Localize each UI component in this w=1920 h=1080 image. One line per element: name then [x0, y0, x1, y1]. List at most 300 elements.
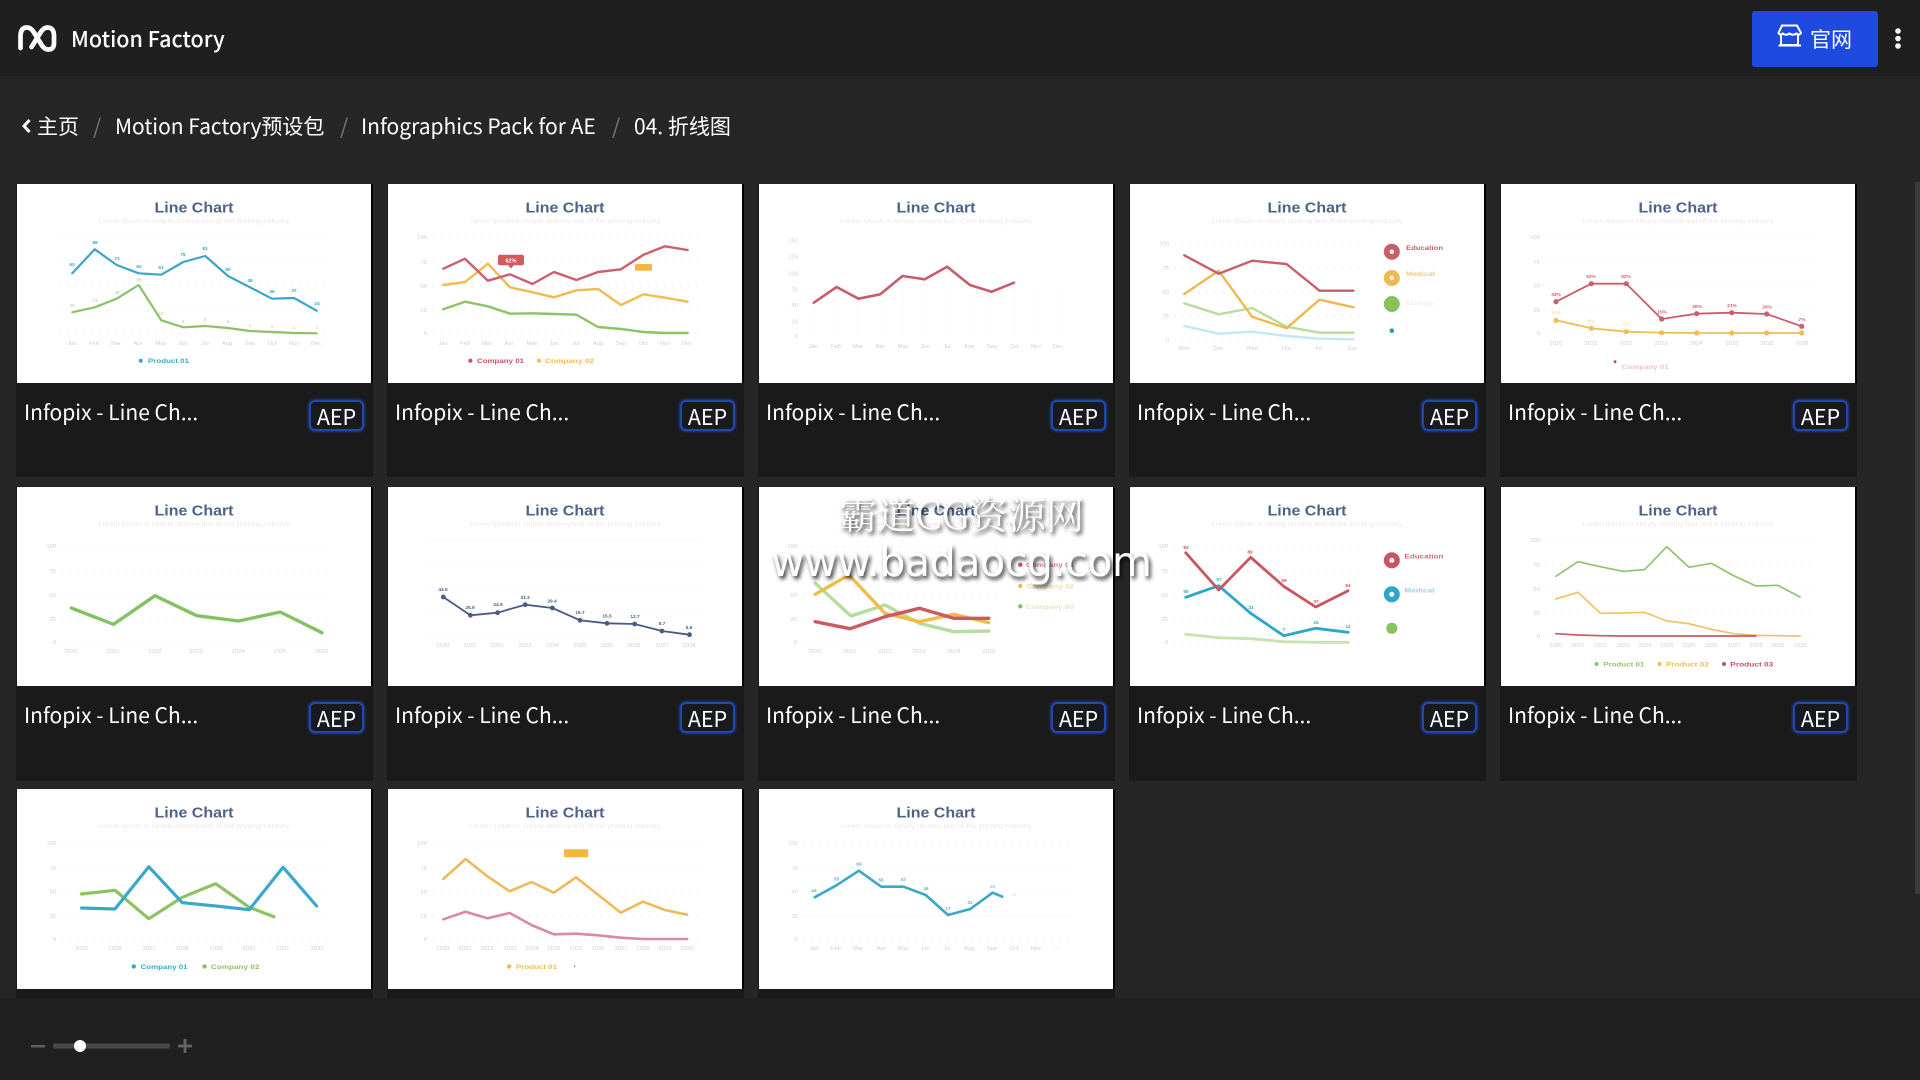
- chart thumbnail 13: 47: [901, 877, 906, 883]
- icon: store: [1777, 24, 1802, 46]
- card 4: [1129, 184, 1486, 477]
- card 3: [758, 184, 1115, 477]
- chart thumbnail 12: 2022: [481, 946, 493, 952]
- chart thumbnail 12: 2025: [548, 946, 560, 952]
- chart thumbnail 4: Sat: [1348, 346, 1357, 352]
- chart thumbnail 7: 25.9: [465, 605, 475, 611]
- chart thumbnail 2: Apr: [504, 341, 514, 347]
- card title: Infopix - Line Ch...: [766, 397, 940, 427]
- chart thumbnail 12: 2025: [570, 946, 582, 952]
- chart thumbnail 1: 81: [202, 246, 208, 252]
- chart thumbnail 2: May: [527, 341, 538, 347]
- chart thumbnail 1: 26: [69, 303, 75, 309]
- chart thumbnail 3: 125: [788, 255, 798, 261]
- chart thumbnail 4: Wed: [1246, 346, 1258, 352]
- chart thumbnail 10: 0: [1537, 634, 1540, 640]
- chart thumbnail 8: Company 02: [1026, 584, 1074, 590]
- chart thumbnail 8: [759, 487, 1113, 686]
- chart thumbnail 13: 0: [795, 937, 798, 943]
- chart thumbnail 6: 2023: [190, 649, 202, 655]
- chart thumbnail 2: Jan: [438, 341, 448, 347]
- card title: Infopix - Line Ch...: [1508, 397, 1682, 427]
- chart thumbnail 11: 2032: [311, 946, 323, 952]
- chart thumbnail 4: Tue: [1213, 346, 1223, 352]
- top navigation bar: [0, 0, 1920, 76]
- chart thumbnail 6: Line Chart: [154, 504, 234, 520]
- chart thumbnail 5: [1501, 184, 1855, 383]
- chart thumbnail 4: Fri: [1316, 346, 1322, 352]
- chart thumbnail 12: 2029: [659, 946, 671, 952]
- chart thumbnail 12: [388, 789, 742, 989]
- chart thumbnail 3: May: [898, 344, 909, 350]
- chart thumbnail 13: 35: [990, 884, 995, 890]
- chart thumbnail 12: 100: [417, 841, 427, 847]
- chart thumbnail 13: 55: [878, 878, 884, 884]
- chart thumbnail 2: Nov: [660, 341, 670, 347]
- chart thumbnail 1: 2: [249, 323, 252, 329]
- chart thumbnail 11: Company 02: [211, 964, 260, 971]
- card 13: [758, 789, 1115, 998]
- chart thumbnail 11: Lorem Ipsum is simply dummy text of the printing industry: [98, 824, 290, 830]
- chart thumbnail 7: 2024: [546, 643, 559, 649]
- chart thumbnail 8: 2020: [809, 649, 821, 655]
- chart thumbnail 9: 31: [1248, 605, 1254, 611]
- chart thumbnail 9: Education: [1404, 554, 1443, 561]
- icon: back chevron: [22, 119, 30, 133]
- chart thumbnail 1: 61: [158, 265, 164, 271]
- chart thumbnail 5: 21%: [1727, 303, 1738, 309]
- chart thumbnail 13: Feb: [831, 946, 841, 952]
- chart thumbnail 10: 2030: [1794, 643, 1806, 649]
- chart thumbnail 7: 33.3: [520, 595, 530, 601]
- chart thumbnail 7: 2023: [519, 643, 531, 649]
- chart thumbnail 2: Dec: [682, 341, 692, 347]
- separator: /: [340, 111, 348, 141]
- chart thumbnail 5: 75: [1534, 260, 1540, 266]
- badge: AEP: AEP: [1059, 703, 1098, 734]
- chart thumbnail 9: 75: [1162, 569, 1168, 575]
- chart thumbnail 9: 15: [1313, 620, 1319, 626]
- chart thumbnail 7: Lorem Ipsum is simply dummy text of the printing industry: [470, 522, 660, 528]
- chart thumbnail 11: [17, 789, 371, 989]
- card title: Infopix - Line Ch...: [1137, 397, 1311, 427]
- chart thumbnail 8: 2021: [844, 649, 856, 655]
- chart thumbnail 6: [17, 487, 371, 686]
- chart thumbnail 5: Company 01: [1622, 364, 1669, 371]
- chart thumbnail 5: 0: [1537, 331, 1540, 337]
- chart thumbnail 5: 2020: [1550, 341, 1562, 347]
- chart thumbnail 1: Jan: [67, 341, 77, 347]
- chart thumbnail 12: 2023: [504, 946, 516, 952]
- chart thumbnail 6: 2022: [149, 649, 161, 655]
- crumb: presets: Motion Factory预设包: [115, 111, 324, 141]
- chart thumbnail 12: Lorem Ipsum is simply dummy text of the printing industry: [470, 824, 660, 830]
- chart thumbnail 13: Line Chart: [896, 806, 976, 822]
- card 12: [387, 789, 744, 998]
- chart thumbnail 13: Lorem Ipsum is simply dummy text of the printing industry: [840, 824, 1032, 830]
- badge: AEP: AEP: [688, 401, 727, 432]
- chart thumbnail 1: 75: [180, 252, 186, 258]
- chart thumbnail 5: 33%: [1551, 292, 1562, 298]
- chart thumbnail 10: 2020: [1550, 643, 1562, 649]
- chart thumbnail 7: 15.5: [602, 614, 612, 620]
- chart thumbnail 1: 1: [271, 324, 274, 330]
- chart thumbnail 1: Sep: [245, 341, 255, 347]
- chart thumbnail 9: 0: [1165, 640, 1168, 646]
- badge: AEP: [309, 702, 364, 733]
- chart thumbnail 2: Jun: [549, 341, 559, 347]
- chart thumbnail 12: 50: [421, 890, 427, 896]
- chart thumbnail 13: Jul: [943, 946, 951, 952]
- card title: Infopix - Line Ch...: [24, 397, 198, 427]
- chart thumbnail 3: [759, 184, 1113, 383]
- chart thumbnail 1: Apr: [133, 341, 143, 347]
- chart thumbnail 13: [759, 789, 1113, 989]
- chart thumbnail 9: 100: [1158, 544, 1168, 550]
- chart thumbnail 2: Lorem Ipsum is simply dummy text of the printing industry: [470, 219, 660, 225]
- chart thumbnail 12: 25: [421, 914, 427, 920]
- chart thumbnail 12: 75: [421, 866, 427, 872]
- chart thumbnail 13: Mar: [853, 946, 863, 952]
- chart thumbnail 3: Oct: [1009, 344, 1019, 350]
- chart thumbnail 8: Company 03: [1026, 604, 1074, 611]
- zoom slider: [31, 1039, 192, 1053]
- card 7: [387, 487, 744, 781]
- chart thumbnail 9: 11: [1345, 624, 1351, 630]
- chart thumbnail 11: 75: [50, 866, 56, 872]
- chart thumbnail 11: 100: [46, 841, 56, 847]
- chart thumbnail 1: 88: [92, 240, 98, 246]
- chart thumbnail 6: 100: [46, 544, 56, 550]
- chart thumbnail 11: 25: [50, 914, 56, 920]
- chart thumbnail 1: 72: [114, 256, 120, 262]
- chart thumbnail 2: Company 01: [477, 358, 524, 365]
- chart thumbnail 1: Oct: [267, 341, 277, 347]
- chart thumbnail 5: Line Chart: [1638, 200, 1718, 216]
- chart thumbnail 5: 5%: [1588, 318, 1595, 324]
- chart thumbnail 3: Nov: [1031, 344, 1041, 350]
- chart thumbnail 5: Lorem Ipsum is simply dummy text of the printing industry: [1582, 219, 1774, 225]
- chart thumbnail 5: 100: [1530, 235, 1540, 241]
- chart thumbnail 9: Line Chart: [1268, 504, 1347, 520]
- chart thumbnail 1: 31: [92, 298, 98, 304]
- chart thumbnail 5: 25: [1534, 308, 1540, 314]
- chart thumbnail 13: Aug: [964, 946, 974, 952]
- chart thumbnail 12: 2021: [459, 946, 471, 952]
- chart thumbnail 5: 2024: [1690, 341, 1703, 347]
- chart thumbnail 6: 0: [53, 640, 56, 646]
- chart thumbnail 11: 2031: [277, 946, 289, 952]
- chart thumbnail 10: 2027: [1728, 643, 1740, 649]
- chart thumbnail 6: Lorem Ipsum is simply dummy text of the printing industry: [98, 522, 290, 528]
- badge: AEP: [1793, 702, 1848, 733]
- chart thumbnail 7: 2022: [491, 643, 503, 649]
- chart thumbnail 10: Line Chart: [1638, 504, 1718, 520]
- chart thumbnail 1: 11: [158, 311, 164, 317]
- button: official website: [1752, 11, 1878, 67]
- chart thumbnail 8: 0: [794, 640, 797, 646]
- chart thumbnail 13: Oct: [1009, 946, 1019, 952]
- chart thumbnail 3: Dec: [1053, 344, 1063, 350]
- chart thumbnail 3: 25: [792, 319, 798, 325]
- breadcrumb: [22, 111, 731, 141]
- chart thumbnail 8: Line Chart: [896, 504, 976, 520]
- chart thumbnail 10: 2022: [1594, 643, 1606, 649]
- chart thumbnail 7: 12.7: [630, 614, 640, 620]
- chart thumbnail 11: 2025: [75, 946, 88, 952]
- chart thumbnail 10: 2029: [1772, 643, 1784, 649]
- chart thumbnail 7: Line Chart: [526, 504, 605, 520]
- chart thumbnail 2: Feb: [460, 341, 470, 347]
- chart thumbnail 1: 50: [136, 277, 142, 283]
- card title: Infopix - Line Ch...: [766, 700, 940, 730]
- chart thumbnail 12: 2030: [681, 946, 693, 952]
- chart thumbnail 2: Oct: [638, 341, 648, 347]
- chart thumbnail 9: 59: [1281, 578, 1287, 584]
- chart thumbnail 3: Feb: [831, 344, 841, 350]
- chart thumbnail 2: 50: [421, 284, 427, 290]
- chart thumbnail 1: 62: [136, 264, 142, 270]
- chart thumbnail 13: May: [898, 946, 909, 952]
- chart thumbnail 3: Jun: [920, 344, 930, 350]
- chart thumbnail 10: 2025: [1661, 643, 1673, 649]
- chart thumbnail 11: 2030: [243, 946, 255, 952]
- chart thumbnail 10: 2024: [1639, 643, 1652, 649]
- card title: Infopix - Line Ch...: [1508, 700, 1682, 730]
- badge: AEP: [680, 400, 735, 431]
- chart thumbnail 4: 75: [1163, 266, 1169, 272]
- chart thumbnail 7: 2028: [683, 643, 695, 649]
- chart thumbnail 9: 25: [1162, 617, 1168, 623]
- card 9: [1129, 487, 1486, 781]
- chart thumbnail 12: 2028: [637, 946, 649, 952]
- chart thumbnail 8: 2022: [879, 649, 891, 655]
- chart thumbnail 10: 2028: [1750, 643, 1762, 649]
- card 5: [1500, 184, 1857, 477]
- chart thumbnail 1: Feb: [89, 341, 99, 347]
- chart thumbnail 1: 60: [225, 267, 231, 273]
- chart thumbnail 9: 50: [1162, 593, 1168, 599]
- separator: /: [93, 111, 101, 141]
- chart thumbnail 5: 52%: [1621, 274, 1632, 280]
- chart thumbnail 4: 100: [1159, 242, 1169, 248]
- badge: AEP: AEP: [688, 703, 727, 734]
- chart thumbnail 4: Education: [1406, 245, 1443, 252]
- chart thumbnail 10: 2023: [1617, 643, 1629, 649]
- chart thumbnail 1: 4: [227, 319, 230, 325]
- chart thumbnail 10: 100: [1530, 538, 1540, 544]
- crumb: current: 04. 折线图: [634, 111, 731, 141]
- chart thumbnail 9: [1130, 487, 1484, 686]
- chart thumbnail 6: 2020: [65, 649, 77, 655]
- chart thumbnail 4: 25: [1163, 314, 1169, 320]
- watermark: www.badaocg.com: [771, 538, 1152, 586]
- card title: Infopix - Line Ch...: [24, 700, 198, 730]
- badge: AEP: [1051, 400, 1106, 431]
- chart thumbnail 1: 1: [316, 325, 319, 331]
- chart thumbnail 7: 2020: [437, 643, 449, 649]
- card 2: [387, 184, 744, 477]
- chart thumbnail 4: Line Chart: [1268, 200, 1347, 216]
- chart thumbnail 3: Aug: [964, 344, 974, 350]
- chart thumbnail 1: Aug: [222, 341, 232, 347]
- chart thumbnail 2: 0: [424, 331, 427, 337]
- chart thumbnail 13: 100: [788, 841, 798, 847]
- brand name: Motion Factory: [71, 23, 225, 54]
- chart thumbnail 12: 2026: [592, 946, 604, 952]
- chart thumbnail 1: 3: [182, 319, 185, 325]
- chart thumbnail 10: 2021: [1572, 643, 1584, 649]
- chart thumbnail 13: 17: [945, 906, 951, 912]
- chart thumbnail 1: Mar: [111, 341, 121, 347]
- chart thumbnail 10: 2026: [1705, 643, 1717, 649]
- chart thumbnail 3: 150: [788, 238, 798, 244]
- chart thumbnail 3: Apr: [875, 344, 885, 350]
- chart thumbnail 4: Ecology: [1406, 300, 1434, 307]
- chart thumbnail 2: Aug: [593, 341, 603, 347]
- chart thumbnail 11: Company 01: [141, 964, 188, 971]
- badge: AEP: AEP: [317, 401, 356, 432]
- chart thumbnail 7: 16.7: [575, 610, 585, 616]
- badge: AEP: AEP: [1801, 703, 1840, 734]
- chart thumbnail 7: 44.5: [438, 587, 448, 593]
- chart thumbnail 5: 2025: [1761, 341, 1773, 347]
- chart thumbnail 5: 2023: [1655, 341, 1667, 347]
- chart thumbnail 13: Sep: [987, 946, 997, 952]
- card 1: [16, 184, 373, 477]
- chart thumbnail 11: 2029: [210, 946, 222, 952]
- chart thumbnail 2: 75: [421, 260, 427, 266]
- chart thumbnail 3: 0: [795, 334, 798, 340]
- chart thumbnail 11: 2026: [109, 946, 121, 952]
- chart thumbnail 5: 2021: [1585, 341, 1597, 347]
- chart thumbnail 9: 57: [1216, 577, 1222, 583]
- chart thumbnail 9: 37: [1313, 599, 1319, 605]
- badge: AEP: AEP: [1430, 703, 1469, 734]
- chart thumbnail 6: 50: [50, 593, 56, 599]
- chart thumbnail 9: 50: [1183, 589, 1189, 595]
- chart thumbnail 13: 44: [811, 888, 817, 894]
- card 11: [16, 789, 373, 998]
- chart thumbnail 5: 7%: [1799, 317, 1806, 323]
- bottom toolbar: [0, 998, 1920, 1080]
- chart thumbnail 6: 2021: [107, 649, 119, 655]
- chart thumbnail 2: 100: [417, 235, 427, 241]
- chart thumbnail 10: [1501, 487, 1855, 686]
- crumb: pack: Infographics Pack for AE: [361, 111, 596, 141]
- chart thumbnail 5: 15%: [1657, 310, 1668, 316]
- chart thumbnail 1: 3: [204, 317, 207, 323]
- chart thumbnail 7: 2021: [464, 643, 476, 649]
- chart thumbnail 11: 2028: [176, 946, 188, 952]
- chart thumbnail 11: 0: [53, 937, 56, 943]
- chart thumbnail 3: Mar: [853, 344, 863, 350]
- chart thumbnail 1: 24: [314, 301, 320, 307]
- chart thumbnail 4: Medical: [1406, 271, 1435, 278]
- chart thumbnail 5: 2025: [1726, 341, 1738, 347]
- chart thumbnail 1: Line Chart: [154, 200, 234, 216]
- chart thumbnail 12: 0: [424, 937, 427, 943]
- chart thumbnail 13: 46: [923, 886, 929, 892]
- separator: /: [612, 111, 620, 141]
- chart thumbnail 4: 50: [1163, 290, 1169, 296]
- chart thumbnail 5: 52%: [1586, 274, 1597, 280]
- badge: AEP: [680, 702, 735, 733]
- scrollbar: [1915, 182, 1920, 894]
- chart thumbnail 10: 75: [1534, 563, 1540, 569]
- badge: AEP: [309, 400, 364, 431]
- badge: AEP: [1422, 400, 1477, 431]
- chart thumbnail 12: Line Chart: [526, 806, 605, 822]
- chart thumbnail 5: 20%: [1762, 304, 1773, 310]
- card 8: [758, 487, 1115, 781]
- badge: AEP: AEP: [1430, 401, 1469, 432]
- watermark: 霸道CG资源网: [839, 485, 1084, 540]
- card title: Infopix - Line Ch...: [1137, 700, 1311, 730]
- chart thumbnail 10: Product 01: [1603, 662, 1645, 668]
- chart thumbnail 6: 25: [50, 617, 56, 623]
- chart thumbnail 13: Jan: [809, 946, 819, 952]
- chart thumbnail 3: Line Chart: [896, 200, 976, 216]
- chart thumbnail 8: 50: [791, 593, 797, 599]
- chart thumbnail 7: 2026: [628, 643, 640, 649]
- chart thumbnail 13: 75: [792, 866, 798, 872]
- chart thumbnail 6: 2025: [316, 649, 328, 655]
- badge: AEP: AEP: [1801, 401, 1840, 432]
- chart thumbnail 11: 50: [50, 890, 56, 896]
- chart thumbnail 3: 50: [792, 303, 798, 309]
- chart thumbnail 10: Lorem Ipsum is simply dummy text of the printing industry: [1582, 522, 1774, 528]
- chart thumbnail 7: 2027: [656, 643, 668, 649]
- card title: Infopix - Line Ch...: [395, 397, 569, 427]
- icon: more menu: [1895, 28, 1901, 49]
- chart thumbnail 12: 2024: [526, 946, 539, 952]
- watermark: [771, 485, 1154, 591]
- chart thumbnail 9: 54: [1345, 583, 1351, 589]
- chart thumbnail 13: 50: [792, 890, 798, 896]
- chart thumbnail 9: Medical: [1404, 588, 1435, 595]
- badge: AEP: [1793, 400, 1848, 431]
- chart thumbnail 11: 2027: [143, 946, 155, 952]
- chart thumbnail 5: 50: [1534, 284, 1540, 290]
- chart thumbnail 1: Jun: [178, 341, 188, 347]
- chart thumbnail 5: 2%: [1623, 322, 1630, 328]
- chart thumbnail 11: Line Chart: [154, 806, 234, 822]
- chart thumbnail 1: 36: [114, 290, 120, 296]
- icon: Motion Factory logo: [18, 25, 56, 52]
- chart thumbnail 13: Dec: [1053, 946, 1063, 952]
- chart thumbnail 8: 2025: [983, 649, 995, 655]
- chart thumbnail 2: Sep: [616, 341, 626, 347]
- chart thumbnail 13: Jun: [920, 946, 930, 952]
- chart thumbnail 8: 75: [791, 569, 797, 575]
- chart thumbnail 12: Product 01: [516, 964, 557, 971]
- chart thumbnail 4: Mon: [1178, 346, 1190, 352]
- chart thumbnail 13: 69: [856, 862, 862, 868]
- chart thumbnail 4: 0: [1166, 338, 1169, 344]
- chart thumbnail 1: 36: [269, 289, 275, 295]
- badge: AEP: AEP: [1059, 401, 1098, 432]
- chart thumbnail 9: 89: [1247, 550, 1253, 556]
- chart thumbnail 2: 62%: [505, 258, 517, 264]
- chart thumbnail 12: 2027: [615, 946, 627, 952]
- chart thumbnail 3: Lorem Ipsum is simply dummy text of the printing industry: [840, 219, 1032, 225]
- chart thumbnail 9: Lorem Ipsum is simply dummy text of the printing industry: [1212, 522, 1402, 528]
- chart thumbnail 4: [1130, 184, 1484, 383]
- chart thumbnail 2: 25: [421, 308, 427, 314]
- chart thumbnail 13: 31: [967, 900, 973, 906]
- chart thumbnail 2: Jul: [572, 341, 580, 347]
